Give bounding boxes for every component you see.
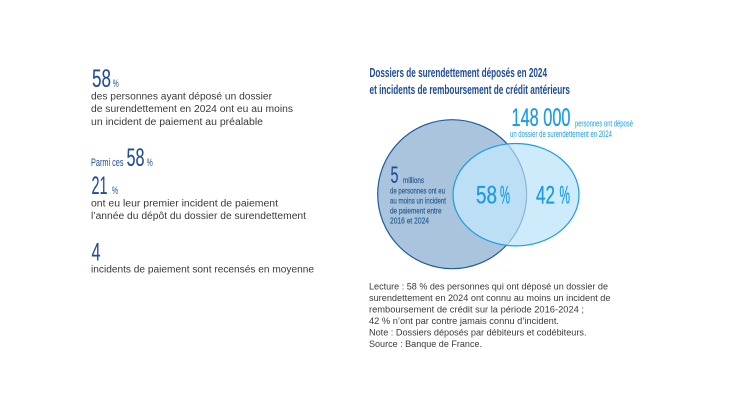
label: 5 millions: de paiement entre	[390, 206, 442, 216]
chart title: et incidents de remboursement de crédit antérieurs	[370, 82, 570, 97]
label: 5 millions: 5	[390, 162, 398, 189]
reading note and source: surendettement en 2024 ont connu au moins un incident de	[369, 293, 610, 304]
reading note and source: remboursement de crédit sur la période 2016-2024 ;	[369, 304, 584, 316]
label: 58 %: 58	[476, 181, 497, 209]
venn diagram: %	[560, 181, 570, 209]
callout: 148 000 persons	[510, 104, 633, 139]
stat block: 21 %	[91, 172, 306, 222]
stat block: 4 incidents: incidents de paiement sont recensés en moyenne	[91, 264, 314, 276]
stat block: 4 incidents	[91, 238, 314, 276]
label: 5 millions: 2016 et 2024	[390, 216, 429, 226]
label: 5 millions: millions	[403, 175, 424, 185]
label: 5 millions: au moins un incident	[390, 196, 446, 206]
subheading: among these 58 %: %	[147, 157, 153, 169]
reading note and source: 42 % n’ont par contre jamais connu d’incident.	[369, 316, 559, 327]
stat block: 58 % of filers: un incident de paiement au préalable	[91, 117, 263, 128]
reading note and source: Source : Banque de France.	[369, 339, 482, 350]
ellipse: 148 000 filers	[453, 144, 579, 246]
chart title	[370, 65, 570, 97]
stat block: 58 % of filers: des personnes ayant déposé un dossier	[91, 92, 273, 102]
stat block: 21 %: ont eu leur premier incident de paiement	[91, 198, 278, 210]
callout: 148 000 persons: un dossier de surendettement en 2024	[510, 129, 612, 139]
circle edge through overlap	[510, 147, 527, 242]
stat block: 58 % of filers: 58	[92, 65, 111, 93]
label: 42 %: 42	[536, 181, 555, 209]
stat block: 58 % of filers: de surendettement en 2024 ont eu au moins	[91, 104, 293, 115]
subheading: among these 58 %: 58	[126, 144, 144, 172]
circle: 5 million persons with incident	[378, 120, 527, 269]
venn diagram	[378, 120, 579, 269]
subheading: among these 58 %: Parmi ces	[91, 157, 124, 169]
stat block: 4 incidents: 4	[92, 238, 101, 266]
label: 5 millions	[390, 162, 446, 226]
stat block: 58 % of filers: %	[113, 78, 119, 90]
chart title: Dossiers de surendettement déposés en 2024	[370, 65, 547, 80]
stat block: 21 %: l’année du dépôt du dossier de surendettement	[91, 211, 306, 222]
stat block: 58 % of filers	[91, 65, 293, 128]
stat block: 21 %: 21	[92, 172, 108, 200]
reading note and source	[369, 282, 610, 350]
stat block: 21 %: %	[112, 185, 118, 197]
callout: 148 000 persons: 148 000	[512, 104, 570, 132]
reading note and source: Note : Dossiers déposés par débiteurs et codébiteurs.	[369, 328, 586, 338]
venn diagram: %	[500, 181, 510, 209]
callout: 148 000 persons: personnes ont déposé	[575, 118, 633, 128]
subheading: among these 58 %	[91, 144, 153, 172]
reading note and source: Lecture : 58 % des personnes qui ont déposé un dossier de	[369, 282, 608, 292]
label: 5 millions: de personnes ont eu	[390, 185, 445, 195]
